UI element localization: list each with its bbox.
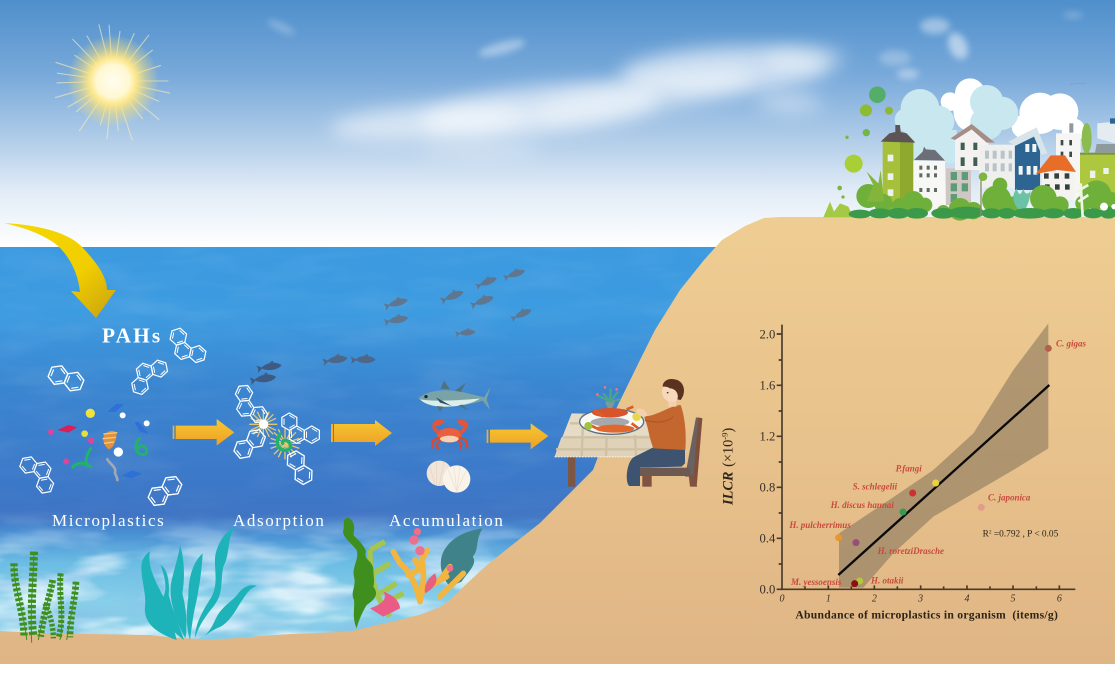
scatter chart bbox=[720, 323, 1086, 622]
species labels: H. pulcherrimus bbox=[788, 520, 851, 530]
species labels bbox=[788, 339, 1086, 587]
species labels: H. discus hannai bbox=[830, 500, 894, 510]
seafood plate bbox=[580, 407, 644, 434]
land / shore bbox=[0, 217, 1115, 664]
chair bbox=[640, 417, 702, 487]
sky background bbox=[0, 0, 1115, 248]
curved yellow arrow into sea bbox=[4, 223, 116, 318]
bird bbox=[1070, 83, 1086, 85]
arrow: microplastics to adsorption bbox=[173, 419, 234, 446]
statistics note: 2 bbox=[989, 529, 992, 535]
clouds bbox=[266, 12, 1083, 159]
y-axis tick labels: 0.8 bbox=[760, 481, 775, 495]
flower vase bbox=[596, 386, 621, 409]
x-axis tick labels: 1 bbox=[826, 593, 831, 604]
small green coral bbox=[370, 542, 403, 617]
axes bbox=[777, 325, 1075, 589]
yellow coral bbox=[393, 550, 463, 602]
y-axis tick labels: 1.6 bbox=[760, 379, 775, 393]
x-axis tick labels: 5 bbox=[1010, 593, 1015, 604]
city clouds bbox=[895, 78, 1085, 163]
y-axis tick labels: 0.4 bbox=[760, 532, 776, 546]
icon: scallop shells bbox=[427, 461, 470, 493]
confidence band bbox=[839, 323, 1048, 588]
x-axis tick labels: 3 bbox=[917, 593, 923, 604]
data points bbox=[835, 345, 1052, 587]
x-axis tick labels: 2 bbox=[872, 593, 877, 604]
y-axis title: -9 bbox=[720, 432, 730, 440]
accumulation organisms and meal bbox=[418, 379, 702, 493]
green aquatic plants bbox=[14, 552, 76, 643]
y-axis tick labels: 1.2 bbox=[760, 430, 775, 444]
sea water bbox=[0, 247, 760, 645]
icon: tuna bbox=[418, 381, 491, 412]
species labels: C. japonica bbox=[988, 493, 1031, 503]
person eating bbox=[627, 379, 702, 487]
species labels: H. otakii bbox=[870, 575, 904, 585]
PAH molecules bbox=[18, 327, 209, 509]
coral reef bbox=[343, 518, 483, 628]
teal sea plant bbox=[441, 528, 483, 587]
arrow: accumulation to human bbox=[487, 423, 548, 449]
buildings bbox=[881, 118, 1115, 211]
species labels: C. gigas bbox=[1056, 339, 1086, 349]
x-axis title: Abundance of microplastics in organism (items/g) bbox=[795, 609, 1058, 622]
y-axis title: ILCR(×10 bbox=[721, 440, 737, 505]
icon: crab bbox=[432, 420, 469, 449]
pink coral bbox=[370, 528, 453, 617]
y-axis title: ) bbox=[721, 427, 737, 432]
y-axis tick labels: 0.0 bbox=[760, 583, 775, 597]
heading: PAHs: PAHs bbox=[102, 324, 162, 348]
adsorption molecules on particles bbox=[228, 382, 319, 487]
shrubs bbox=[823, 170, 1115, 221]
x-axis tick labels bbox=[779, 593, 1062, 604]
x-axis tick labels: 4 bbox=[964, 593, 969, 604]
species labels: H. roretziDrasche bbox=[877, 546, 944, 556]
statistics note: R bbox=[983, 530, 989, 540]
label: Adsorption: Adsorption bbox=[233, 511, 326, 530]
green balloons bbox=[837, 86, 893, 199]
arrow: adsorption to accumulation bbox=[331, 420, 392, 446]
species labels: M. yessoensis bbox=[790, 577, 842, 587]
species labels: P.fangi bbox=[896, 463, 922, 473]
school of small fish bbox=[249, 266, 533, 385]
label: Accumulation: Accumulation bbox=[389, 511, 505, 530]
dining table bbox=[555, 413, 662, 487]
PAHs and microplastics section bbox=[18, 324, 319, 509]
species labels: S. schlegelii bbox=[853, 481, 898, 491]
green kelp bbox=[343, 518, 376, 628]
x-axis tick labels: 6 bbox=[1057, 593, 1062, 604]
x-axis tick labels: 0 bbox=[779, 593, 784, 604]
city on the cliff bbox=[823, 78, 1115, 221]
seabed plants left bbox=[14, 527, 257, 643]
regression line bbox=[838, 385, 1049, 575]
y-axis tick labels: 2.0 bbox=[760, 327, 775, 341]
microplastic particles bbox=[48, 404, 150, 480]
teal kelp bbox=[141, 527, 257, 640]
icon: sun bbox=[55, 25, 170, 140]
label: Microplastics: Microplastics bbox=[52, 511, 165, 530]
statistics note: =0.792 , P < 0.05 bbox=[992, 530, 1059, 540]
y-axis tick labels bbox=[760, 327, 776, 597]
